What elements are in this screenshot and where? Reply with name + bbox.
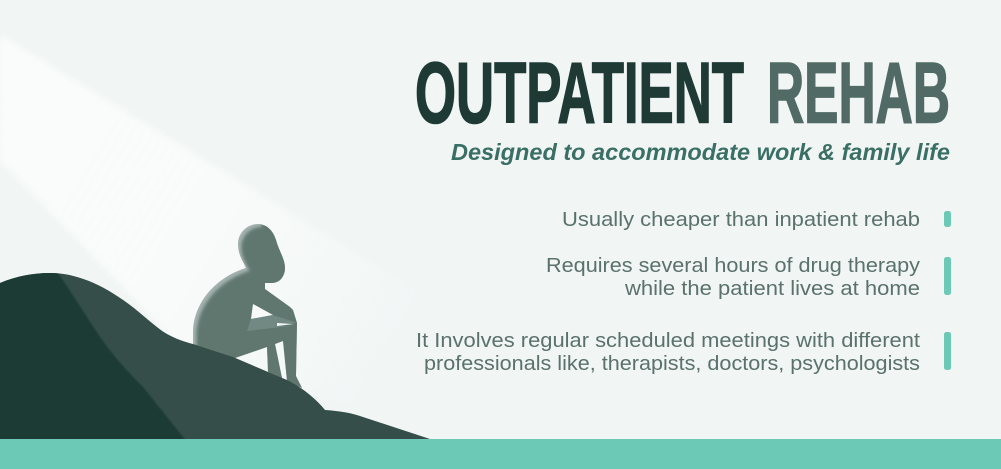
item 2 marker [944, 257, 951, 295]
item 3 line 2: professionals like, therapists, doctors, psychologists [424, 352, 920, 375]
subtitle: Designed to accommodate work & family life [451, 139, 950, 165]
light beam [0, 35, 440, 440]
bottom teal band [0, 439, 1001, 469]
item 2 line 1: Requires several hours of drug therapy [546, 254, 921, 277]
item 3 line 1: It Involves regular scheduled meetings with different [416, 329, 920, 352]
item 1 text: Usually cheaper than inpatient rehab [562, 208, 920, 231]
figure: seated person silhouette [193, 224, 302, 388]
list item 2 [546, 254, 921, 300]
item 1 marker [944, 211, 951, 227]
illustration: person sitting on hill [0, 215, 430, 442]
list item 3 [416, 329, 920, 375]
hill: shadow side [0, 265, 187, 442]
figure: forearm highlight [247, 315, 297, 331]
title: outpatient: OUTPATIENT [415, 46, 744, 142]
figure: gap between arm and thigh [251, 304, 273, 319]
item 3 marker [944, 332, 951, 370]
hill: lit side [0, 273, 430, 439]
title [415, 46, 950, 142]
figure: gap under forearm [277, 323, 294, 326]
item 2 line 2: while the patient lives at home [624, 277, 920, 300]
